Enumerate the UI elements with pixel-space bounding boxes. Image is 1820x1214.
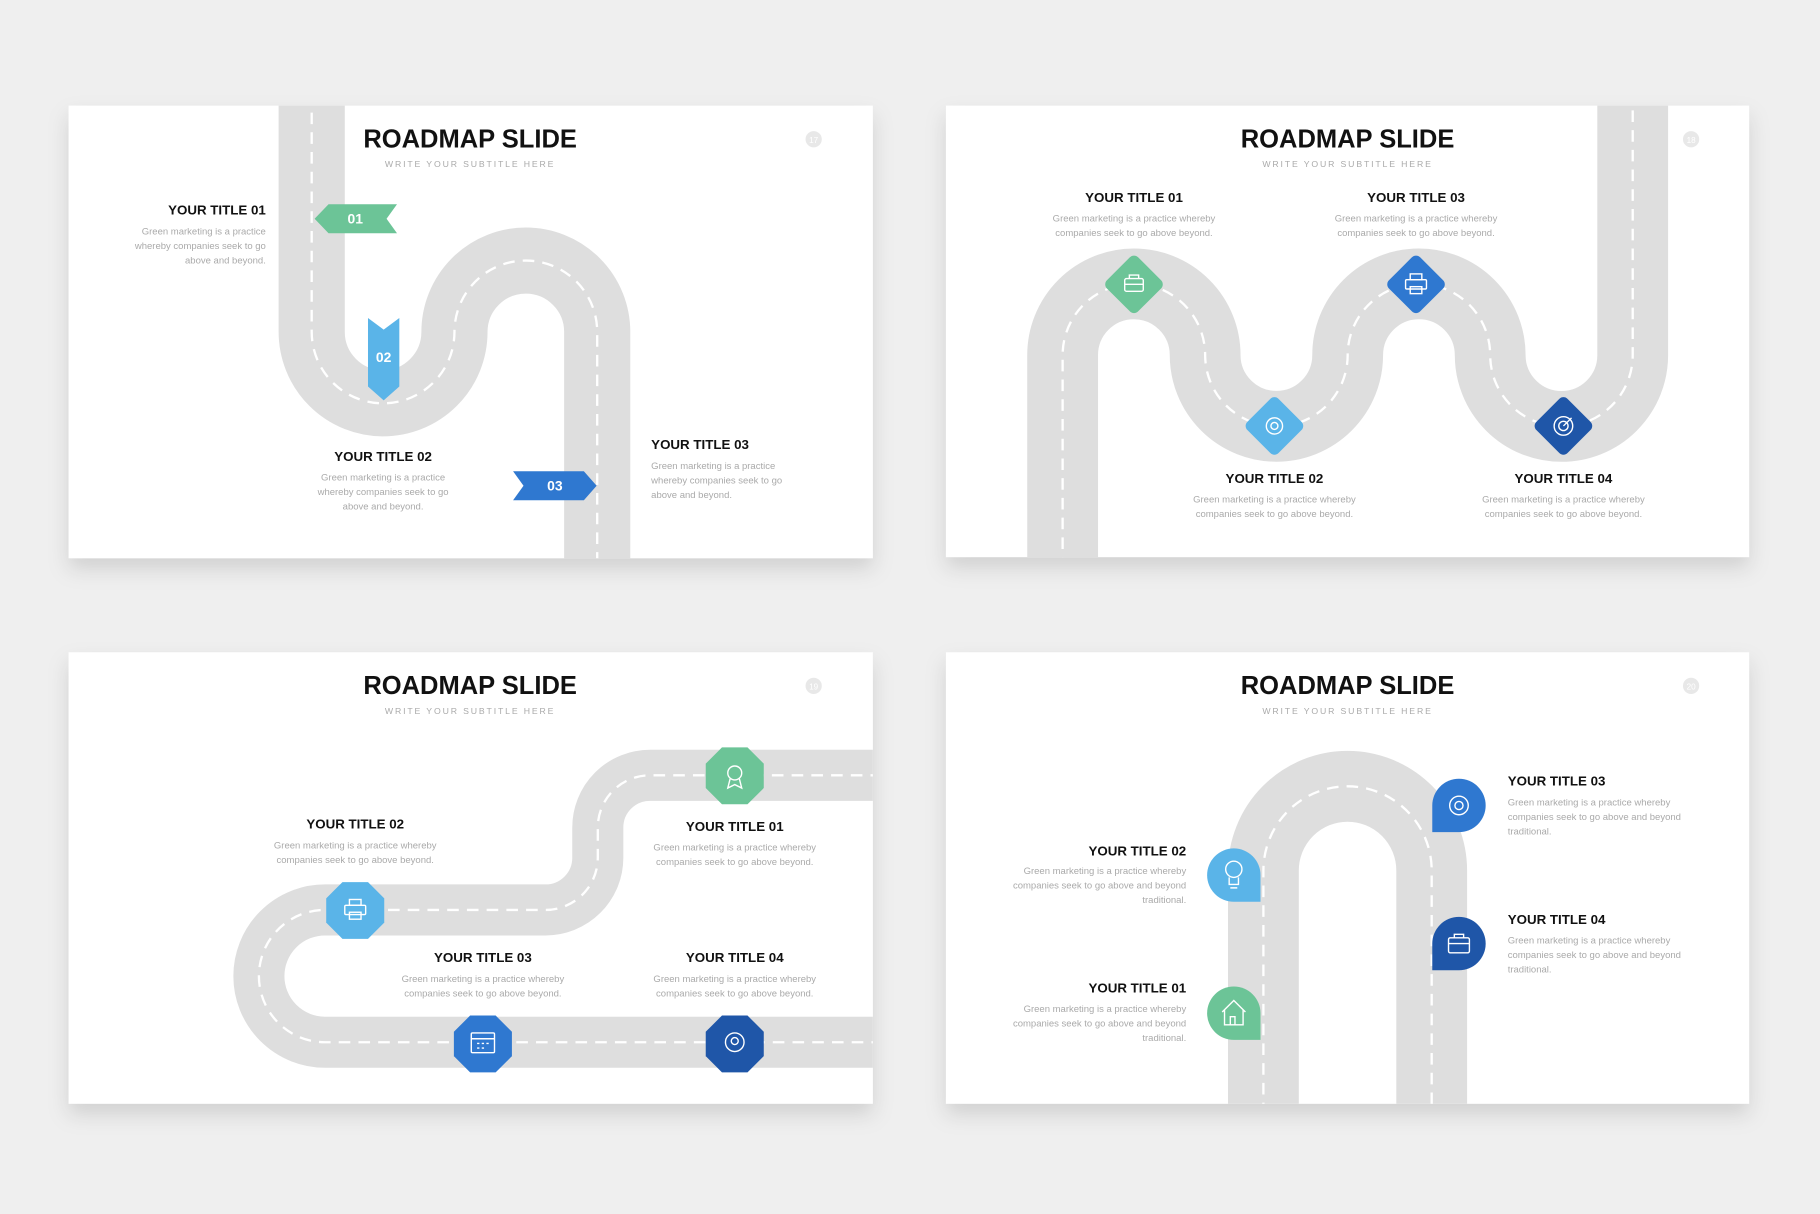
text: title 02: YOUR TITLE 02 bbox=[1226, 471, 1323, 486]
panel: slide 4 bbox=[946, 652, 1749, 1114]
text: title 02: Green marketing is a practice whereby bbox=[274, 840, 437, 851]
text: title 02: companies seek to go above beyond. bbox=[1196, 509, 1353, 520]
text: title 03: Green marketing is a practice bbox=[651, 461, 775, 472]
road: switchback bbox=[259, 775, 882, 1042]
text: title 03: above and beyond. bbox=[651, 490, 732, 501]
road: winding S bbox=[312, 93, 597, 569]
text: title 04 bbox=[1508, 912, 1681, 976]
text: title 03: companies seek to go above and beyond bbox=[1508, 812, 1681, 823]
text: title 04: YOUR TITLE 04 bbox=[1515, 471, 1613, 486]
icon: octagon printer bbox=[326, 882, 384, 939]
icon: diamond printer bbox=[1385, 253, 1447, 316]
text: title 01: Green marketing is a practice whereby bbox=[653, 843, 816, 854]
heading: ROADMAP SLIDE bbox=[363, 125, 577, 153]
text: title 01: Green marketing is a practice whereby bbox=[1053, 214, 1216, 225]
page number: 20 bbox=[1687, 682, 1696, 691]
text: title 03: YOUR TITLE 03 bbox=[651, 437, 749, 452]
text: title 04: traditional. bbox=[1508, 965, 1552, 976]
icon: diamond briefcase bbox=[1103, 253, 1165, 316]
text: title 01 bbox=[1013, 980, 1187, 1044]
icon: drop briefcase bbox=[1432, 917, 1486, 970]
text: title 04: companies seek to go above beyond. bbox=[656, 988, 813, 999]
text: title 01 bbox=[653, 819, 816, 868]
icon: drop gear bbox=[1432, 779, 1486, 832]
text: title 01: traditional. bbox=[1142, 1033, 1186, 1044]
road: wave bbox=[1063, 93, 1633, 569]
icon: octagon award bbox=[706, 747, 764, 804]
text: title 04: YOUR TITLE 04 bbox=[1508, 912, 1606, 927]
marker 01 bbox=[315, 204, 397, 233]
page number: 17 bbox=[809, 136, 819, 145]
heading bbox=[1241, 672, 1454, 716]
text: title 03: companies seek to go above beyond. bbox=[1337, 228, 1495, 239]
icon: octagon location bbox=[706, 1016, 764, 1072]
text: title 03: companies seek to go above beyond. bbox=[404, 988, 562, 999]
marker 02: 02 bbox=[376, 349, 392, 365]
text: title 04 bbox=[653, 950, 816, 999]
text: title 01 bbox=[1053, 190, 1216, 239]
text: title 02 bbox=[274, 817, 437, 866]
text: title 02: whereby companies seek to go bbox=[317, 487, 449, 498]
text: title 03 bbox=[650, 437, 782, 501]
text: title 03 bbox=[1335, 190, 1498, 239]
text: title 03: traditional. bbox=[1508, 826, 1552, 837]
text: title 03 bbox=[1508, 774, 1681, 837]
heading: ROADMAP SLIDE bbox=[1241, 125, 1454, 153]
heading: WRITE YOUR SUBTITLE HERE bbox=[1262, 706, 1433, 716]
text: title 01: Green marketing is a practice bbox=[142, 226, 266, 237]
text: title 02: above and beyond. bbox=[343, 502, 423, 513]
page number bbox=[806, 678, 822, 694]
page number bbox=[806, 131, 822, 147]
text: title 03: Green marketing is a practice whereby bbox=[1335, 214, 1498, 225]
text: title 02 bbox=[1193, 471, 1356, 520]
text: title 02: traditional. bbox=[1142, 895, 1186, 906]
text: title 02 bbox=[317, 449, 449, 513]
page number bbox=[1683, 678, 1699, 694]
text: title 04: companies seek to go above beyond. bbox=[1485, 509, 1642, 520]
marker 01: 01 bbox=[347, 210, 363, 226]
text: title 01: YOUR TITLE 01 bbox=[1085, 190, 1183, 205]
icon: drop lightbulb bbox=[1207, 848, 1261, 902]
text: title 01 bbox=[134, 203, 266, 266]
panel: slide 1 bbox=[69, 93, 873, 569]
heading bbox=[363, 125, 577, 169]
text: title 03: YOUR TITLE 03 bbox=[434, 950, 532, 965]
text: title 03: Green marketing is a practice whereby bbox=[1508, 797, 1671, 808]
panel: slide 2 bbox=[946, 93, 1749, 569]
text: title 02 bbox=[1013, 843, 1186, 906]
text: title 04: companies seek to go above and beyond bbox=[1508, 950, 1681, 961]
heading bbox=[1241, 125, 1454, 169]
text: title 02: Green marketing is a practice bbox=[321, 472, 445, 483]
icon: octagon calendar bbox=[454, 1016, 512, 1072]
text: title 01: YOUR TITLE 01 bbox=[686, 819, 784, 834]
heading: WRITE YOUR SUBTITLE HERE bbox=[385, 159, 555, 169]
page number: 18 bbox=[1687, 136, 1696, 145]
text: title 01: YOUR TITLE 01 bbox=[168, 203, 266, 218]
text: title 01: companies seek to go above beyond. bbox=[656, 857, 813, 868]
text: title 01: YOUR TITLE 01 bbox=[1088, 980, 1187, 995]
text: title 04: Green marketing is a practice whereby bbox=[1508, 936, 1671, 947]
heading: WRITE YOUR SUBTITLE HERE bbox=[1262, 159, 1433, 169]
text: title 03: whereby companies seek to go bbox=[650, 475, 782, 486]
text: title 03: Green marketing is a practice whereby bbox=[402, 974, 564, 985]
text: title 03: YOUR TITLE 03 bbox=[1508, 774, 1605, 789]
heading bbox=[363, 672, 577, 716]
text: title 01: Green marketing is a practice whereby bbox=[1024, 1004, 1186, 1015]
text: title 03: YOUR TITLE 03 bbox=[1367, 190, 1465, 205]
text: title 02: Green marketing is a practice whereby bbox=[1024, 866, 1186, 877]
marker 02 bbox=[368, 318, 399, 400]
text: title 04: Green marketing is a practice whereby bbox=[653, 974, 816, 985]
text: title 01: above and beyond. bbox=[185, 255, 266, 266]
heading: WRITE YOUR SUBTITLE HERE bbox=[385, 706, 555, 716]
text: title 02: YOUR TITLE 02 bbox=[306, 817, 404, 832]
heading: ROADMAP SLIDE bbox=[1241, 672, 1454, 700]
text: title 04 bbox=[1482, 471, 1645, 520]
text: title 03 bbox=[402, 950, 564, 999]
text: title 02: companies seek to go above beyond. bbox=[277, 855, 434, 866]
marker 03: 03 bbox=[547, 477, 563, 493]
icon: drop house bbox=[1207, 987, 1261, 1040]
text: title 02: YOUR TITLE 02 bbox=[1088, 843, 1186, 858]
text: title 04: Green marketing is a practice whereby bbox=[1482, 495, 1645, 506]
page number: 19 bbox=[809, 682, 819, 691]
road: arch bbox=[1263, 786, 1432, 1114]
icon: diamond gear bbox=[1243, 395, 1306, 457]
text: title 02: Green marketing is a practice whereby bbox=[1193, 495, 1356, 506]
heading: ROADMAP SLIDE bbox=[363, 672, 577, 700]
marker 03 bbox=[513, 471, 597, 500]
text: title 04: YOUR TITLE 04 bbox=[686, 950, 784, 965]
icon: diamond target bbox=[1532, 395, 1595, 457]
text: title 01: whereby companies seek to go bbox=[134, 241, 266, 252]
text: title 01: companies seek to go above beyond. bbox=[1055, 228, 1213, 239]
text: title 01: companies seek to go above and beyond bbox=[1013, 1019, 1186, 1030]
text: title 02: companies seek to go above and beyond bbox=[1013, 880, 1186, 891]
text: title 02: YOUR TITLE 02 bbox=[334, 449, 432, 464]
page number bbox=[1683, 131, 1699, 147]
panel: slide 3 bbox=[69, 652, 882, 1104]
